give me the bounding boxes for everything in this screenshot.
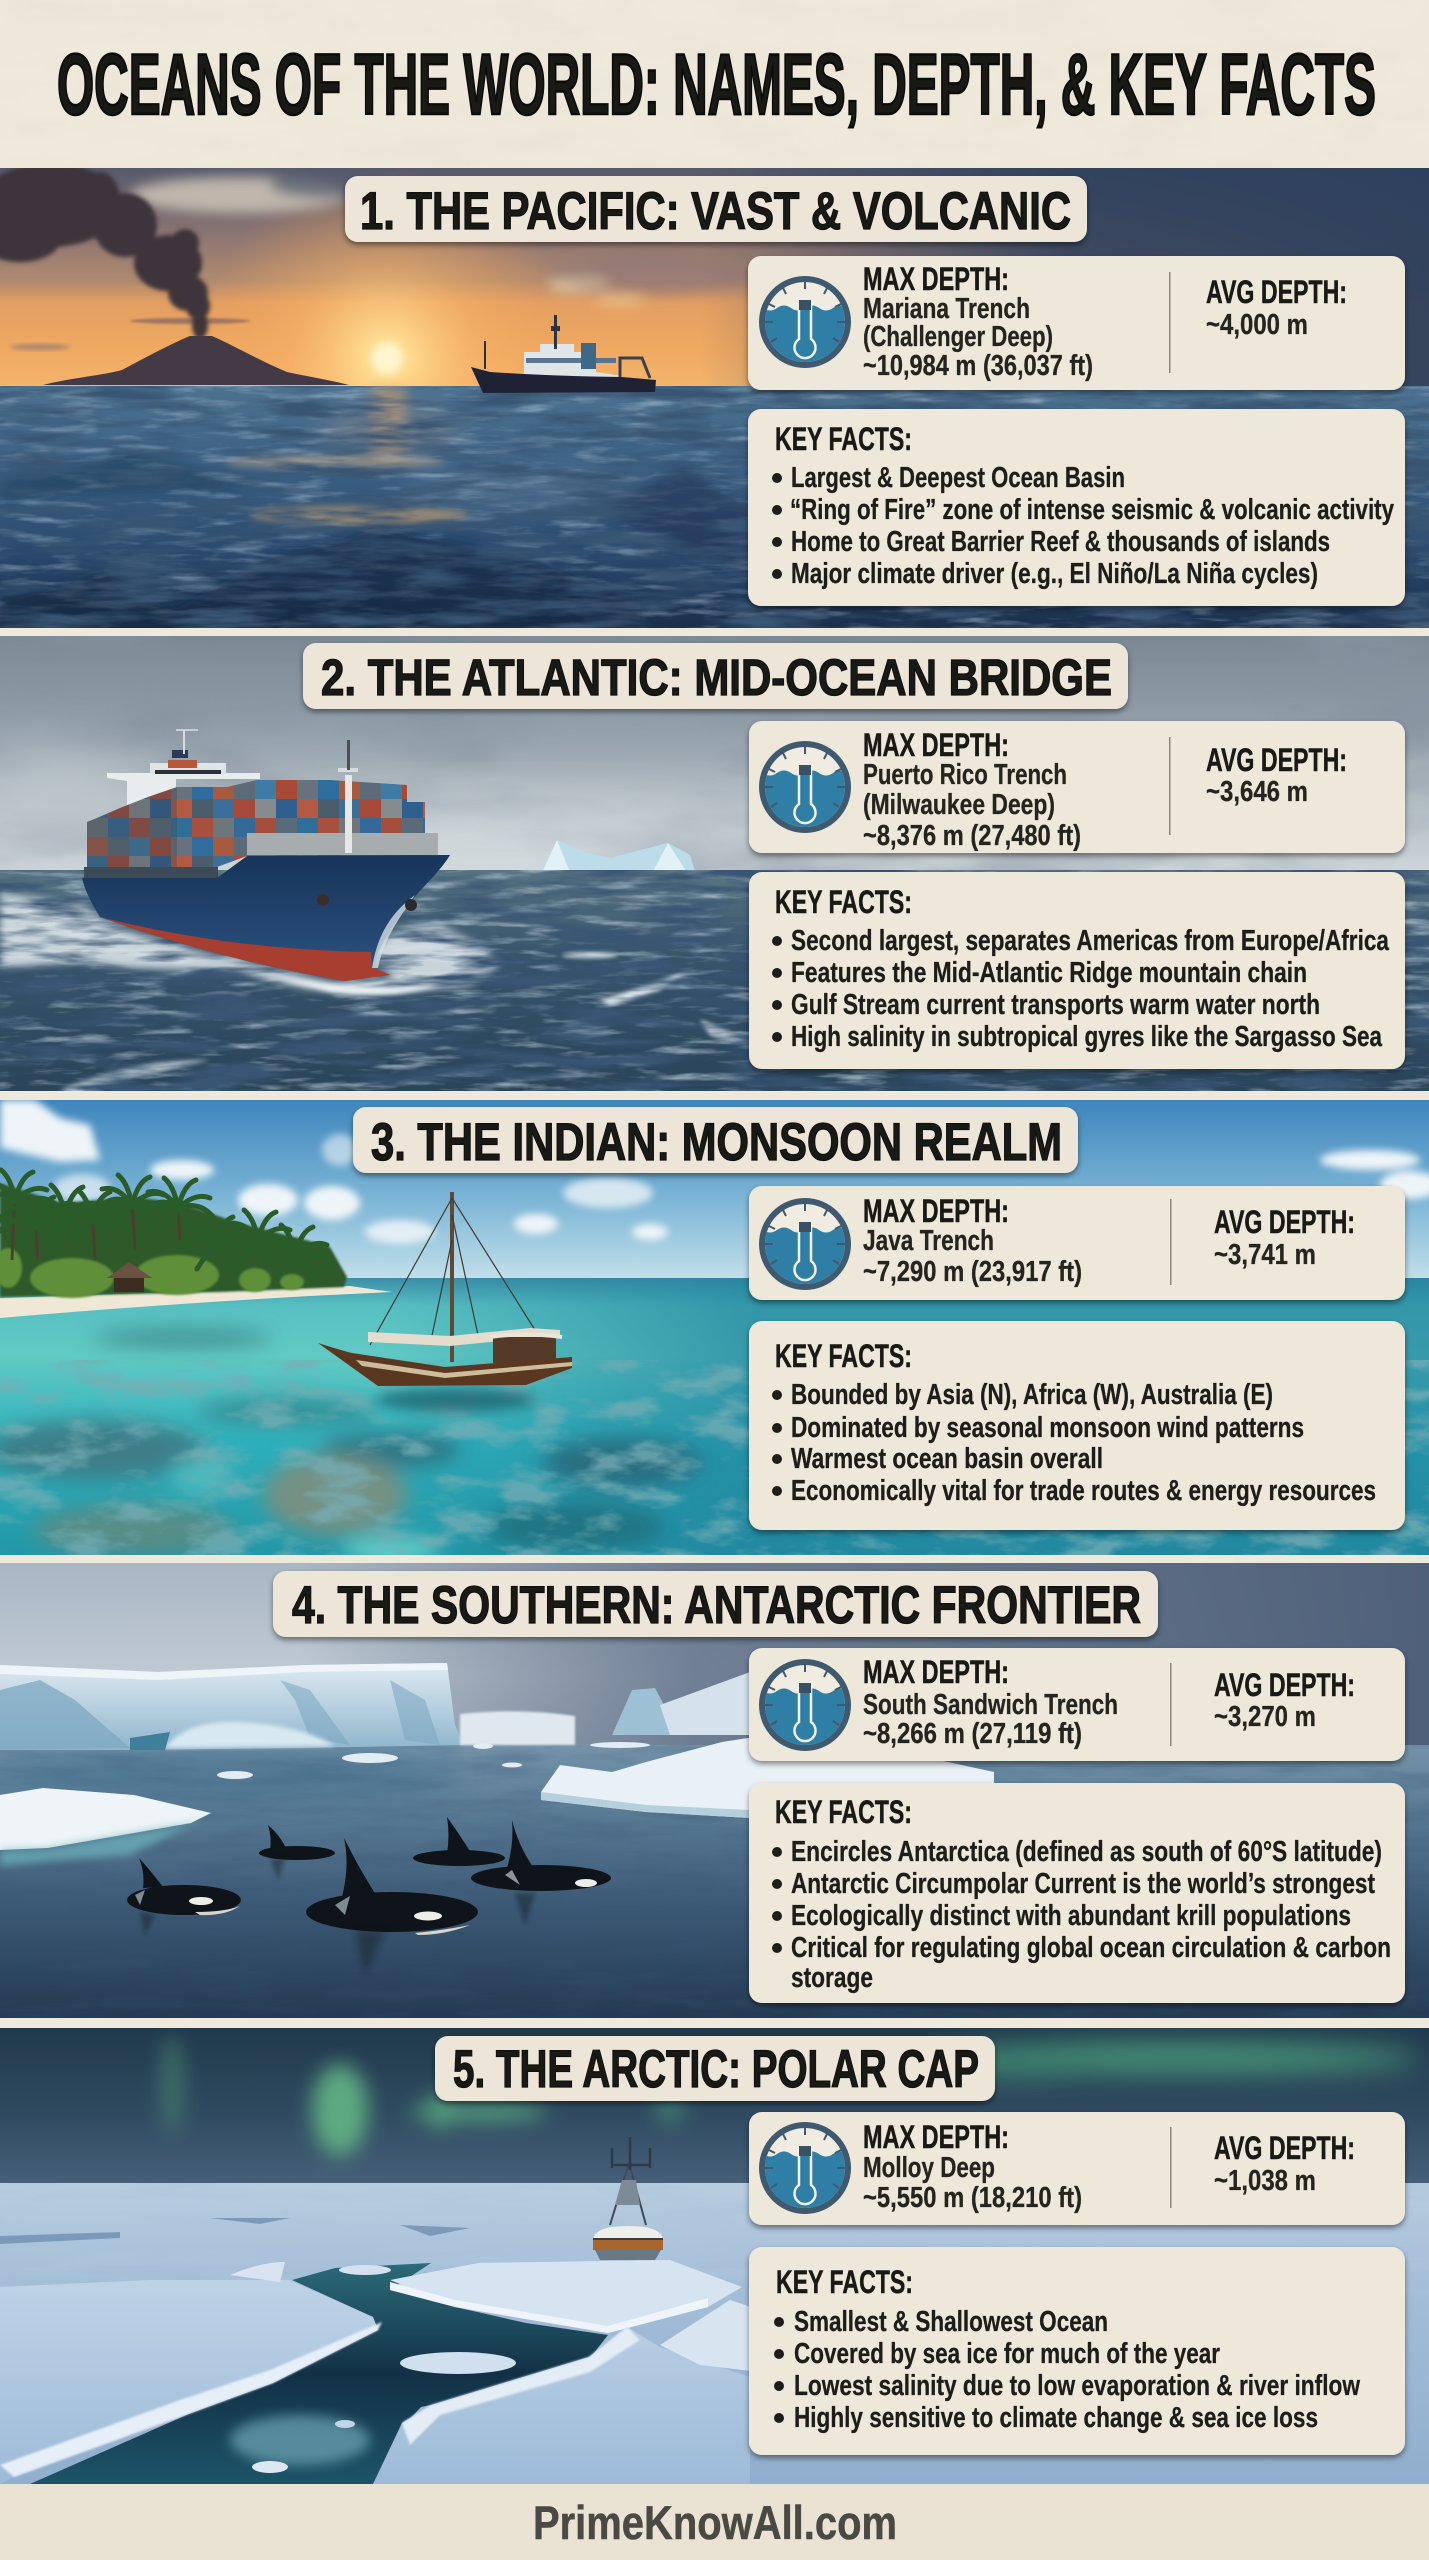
fact list (774, 2306, 1360, 2434)
key facts panel (749, 2247, 1405, 2455)
max depth text (863, 727, 1081, 852)
orca (259, 1825, 335, 1880)
max depth text: Mariana Trench (863, 293, 1030, 325)
max depth text: MAX DEPTH: (863, 2119, 1009, 2155)
floating ice floes (0, 1788, 211, 1850)
aurora (160, 2035, 685, 2156)
icon: depth gauge (759, 2122, 851, 2214)
distant ice (460, 1711, 575, 1745)
volcano smoke plume (0, 163, 210, 339)
key facts panel: KEY FACTS: (776, 2264, 913, 2300)
max depth text: MAX DEPTH: (863, 1193, 1009, 1229)
icon: depth gauge (759, 276, 851, 368)
heading pill: 1. THE PACIFIC: VAST & VOLCANIC (360, 182, 1071, 241)
fact list: Covered by sea ice for much of the year (794, 2338, 1220, 2370)
average depth text: AVG DEPTH: (1214, 1204, 1355, 1240)
average depth text: AVG DEPTH: (1214, 1667, 1355, 1703)
scene: container ship in rough sea (0, 636, 1429, 1095)
volcano (43, 336, 349, 385)
max depth text (863, 2119, 1082, 2214)
section 4: Southern (0, 1563, 1429, 2018)
orca pod (127, 1817, 611, 1975)
wake (0, 893, 500, 994)
key facts panel (749, 1783, 1405, 2003)
ice sheets and water channel (0, 2218, 760, 2484)
scene: icebergs and orcas (0, 1563, 1429, 2018)
average depth text (1214, 1204, 1355, 1271)
fact list (772, 925, 1390, 1053)
average depth text (1206, 742, 1347, 808)
average depth text: AVG DEPTH: (1214, 2130, 1355, 2166)
max depth text: South Sandwich Trench (863, 1689, 1118, 1721)
key facts panel: KEY FACTS: (775, 1794, 912, 1830)
section 3: Indian (0, 1100, 1429, 1562)
depth panel (749, 1186, 1405, 1300)
fact list (772, 1836, 1391, 1994)
key facts panel (749, 1321, 1405, 1530)
fact list: Warmest ocean basin overall (791, 1443, 1103, 1475)
heading pill (435, 2036, 995, 2101)
max depth text (863, 261, 1093, 382)
footer: PrimeKnowAll.com (533, 2496, 897, 2549)
depth panel (749, 721, 1405, 853)
fact list (772, 462, 1394, 590)
max depth text: ~8,266 m (27,119 ft) (863, 1718, 1082, 1750)
average depth text: ~3,741 m (1214, 1239, 1316, 1271)
key facts panel: KEY FACTS: (775, 884, 912, 920)
heading pill: 5. THE ARCTIC: POLAR CAP (453, 2040, 979, 2099)
key facts panel: KEY FACTS: (775, 421, 912, 457)
average depth text: AVG DEPTH: (1206, 742, 1347, 778)
section 2: Atlantic (0, 636, 1429, 1095)
section 5: Arctic (0, 2028, 1429, 2484)
average depth text: ~4,000 m (1206, 309, 1308, 341)
fact list: Largest & Deepest Ocean Basin (791, 462, 1125, 494)
max depth text: ~5,550 m (18,210 ft) (863, 2182, 1082, 2214)
fact list: Smallest & Shallowest Ocean (794, 2306, 1108, 2338)
key facts panel (749, 872, 1405, 1069)
research ship (471, 315, 656, 393)
average depth text: ~3,646 m (1206, 776, 1308, 808)
fact list (772, 1379, 1376, 1507)
reef patches (0, 1328, 702, 1562)
fact list: Features the Mid-Atlantic Ridge mountain chain (791, 957, 1307, 989)
max depth text: ~7,290 m (23,917 ft) (863, 1256, 1082, 1288)
heading pill: 3. THE INDIAN: MONSOON REALM (371, 1113, 1062, 1172)
iceberg (540, 840, 695, 870)
scene: volcano at sunset with research ship (0, 163, 1429, 628)
average depth text (1214, 1667, 1355, 1733)
icon: depth gauge (759, 1198, 851, 1290)
island with palm trees and beach (0, 1170, 392, 1318)
max depth text: ~10,984 m (36,037 ft) (863, 350, 1093, 382)
sun reflection (372, 386, 406, 456)
key facts panel: KEY FACTS: (775, 1338, 912, 1374)
title band (0, 0, 1429, 168)
max depth text: MAX DEPTH: (863, 727, 1009, 763)
section 1: Pacific (0, 163, 1429, 628)
max depth text: ~8,376 m (27,480 ft) (863, 820, 1081, 852)
max depth text (863, 1654, 1118, 1750)
average depth text: AVG DEPTH: (1206, 274, 1347, 310)
container ship (82, 730, 450, 981)
orca (127, 1858, 241, 1935)
heading pill: 2. THE ATLANTIC: MID-OCEAN BRIDGE (321, 649, 1112, 706)
depth panel (748, 256, 1405, 390)
orca (471, 1820, 611, 1925)
average depth text (1214, 2130, 1355, 2197)
orca (413, 1817, 505, 1866)
fact list: storage (791, 1962, 873, 1994)
max depth text (863, 1193, 1082, 1288)
tabular iceberg (0, 1663, 464, 1750)
max depth text: Java Trench (863, 1225, 994, 1257)
icon: depth gauge (759, 1659, 851, 1751)
scene: aurora over sea ice with buoy (0, 2028, 1429, 2484)
wooden dhow (318, 1192, 572, 1412)
large foreground waves (0, 448, 750, 628)
footer (0, 2484, 1429, 2560)
average depth text: ~3,270 m (1214, 1701, 1316, 1733)
icon: depth gauge (759, 741, 851, 833)
buoy (593, 2137, 663, 2260)
key facts panel (748, 409, 1405, 606)
depth panel (749, 2112, 1405, 2225)
scene: tropical island and dhow over reef (0, 1100, 1429, 1562)
orca (306, 1838, 478, 1975)
depth panel (749, 1648, 1405, 1761)
average depth text: ~1,038 m (1214, 2165, 1316, 2197)
max depth text: MAX DEPTH: (863, 261, 1009, 297)
max depth text: MAX DEPTH: (863, 1654, 1009, 1690)
fact list: Bounded by Asia (N), Africa (W), Australia (E) (791, 1379, 1273, 1411)
max depth text: (Milwaukee Deep) (863, 789, 1055, 821)
average depth text (1206, 274, 1347, 341)
heading pill: 4. THE SOUTHERN: ANTARCTIC FRONTIER (292, 1576, 1141, 1635)
max depth text: Molloy Deep (863, 2152, 995, 2184)
max depth text: (Challenger Deep) (863, 321, 1053, 353)
max depth text: Puerto Rico Trench (863, 759, 1067, 791)
